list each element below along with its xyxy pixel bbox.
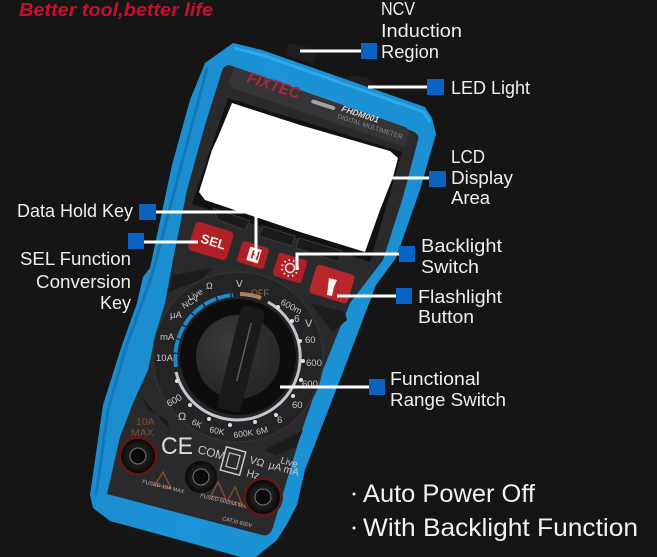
dial labels: 60K	[209, 424, 226, 437]
callout: SEL function conversion key: Key	[100, 292, 132, 313]
callout: functional range switch	[280, 368, 506, 410]
fuse labels: FUSED 10A MAX	[142, 479, 185, 495]
callout: data hold key: Data Hold Key	[17, 200, 134, 221]
dial labels: 60	[305, 335, 316, 346]
callout: LCD display area: Area	[451, 187, 491, 208]
dial labels: mA	[160, 332, 175, 343]
callout: SEL function conversion key: Conversion	[36, 271, 131, 292]
backlight button	[272, 252, 308, 284]
input labels	[245, 454, 300, 482]
callout: NCV induction region: Region	[381, 41, 439, 62]
fuse labels: CAT.III 600V	[222, 516, 253, 529]
top brand strip	[229, 68, 409, 147]
dial tick dots	[175, 305, 305, 427]
model badge	[311, 99, 336, 111]
dial labels	[156, 279, 322, 440]
dial labels: 600	[302, 379, 318, 390]
dial labels: 6K	[190, 417, 204, 430]
callout: backlight switch	[297, 235, 502, 277]
10A MAX marking: 10A	[136, 416, 155, 428]
SEL button	[187, 221, 235, 261]
casing highlight	[234, 48, 430, 122]
10A MAX marking: MAX	[131, 427, 154, 439]
input labels: Live	[279, 455, 299, 470]
dial labels: 10A	[156, 353, 174, 364]
multimeter	[90, 43, 436, 557]
input labels: Hz	[245, 467, 261, 482]
fuse labels: FUSED 600mA MAX	[200, 493, 251, 511]
callout: NCV induction region	[300, 0, 462, 62]
wedge details	[140, 268, 347, 456]
callout: functional range switch: Range Switch	[390, 389, 506, 410]
COM input jack	[185, 461, 217, 493]
blue rubber casing	[90, 43, 436, 557]
dial labels: 600m	[279, 297, 304, 316]
warning triangles	[155, 472, 242, 504]
model subtitle: DIGITAL MULTIMETER	[336, 113, 404, 141]
fuse labels	[142, 479, 253, 529]
callout: NCV induction region: Induction	[381, 20, 462, 41]
rotary knob	[180, 299, 296, 415]
dial labels: 6M	[255, 424, 269, 437]
callout: flashlight button: Flashlight	[418, 286, 502, 307]
dial labels: 600	[306, 358, 322, 369]
dial labels: V	[236, 279, 243, 290]
double insulation symbol	[220, 447, 246, 475]
LCD display area	[199, 103, 398, 252]
callout: flashlight button	[337, 286, 502, 327]
CE mark: CE	[161, 433, 193, 460]
dial labels: V	[305, 318, 313, 330]
dial labels: 60	[292, 400, 303, 411]
feature: with backlight function: With Backlight Function	[363, 514, 638, 542]
casing left shading	[96, 68, 207, 495]
callout: backlight switch: Switch	[421, 256, 479, 277]
model name: FHDM001	[340, 103, 381, 125]
input labels: VΩ	[248, 454, 266, 470]
dial arc: orange OFF segment	[240, 294, 261, 298]
dial arc: grey segment	[176, 302, 300, 420]
callout: LED light	[368, 77, 530, 98]
SEL button: SEL	[199, 231, 228, 253]
dial labels: Live	[186, 286, 205, 303]
callout: data hold key	[17, 200, 256, 256]
V input jack	[243, 477, 283, 517]
COM label: COM	[196, 442, 227, 463]
brand logo: FIXTEC	[245, 70, 303, 103]
hold button	[236, 240, 270, 270]
callout: SEL function conversion key: SEL Function	[20, 248, 131, 269]
input labels: μA mA	[267, 459, 300, 479]
dial labels: μA	[170, 310, 182, 321]
dial labels: 600	[165, 392, 184, 410]
dial labels: 6	[277, 415, 282, 426]
LCD bezel	[192, 98, 402, 262]
feature: auto power off: Auto Power Off	[363, 480, 535, 508]
callout: LCD display area	[392, 146, 514, 208]
dial labels: 600K	[233, 427, 254, 440]
callout: backlight switch: Backlight	[421, 235, 502, 256]
callout: LCD display area: Display	[451, 167, 514, 188]
dial labels: Ω	[178, 411, 186, 423]
callout: flashlight button: Button	[418, 306, 474, 327]
callout: LCD display area: LCD	[451, 146, 485, 167]
callout: LED light: LED Light	[451, 77, 530, 98]
10A MAX marking	[131, 416, 155, 439]
dial plate rim	[153, 272, 323, 442]
NCV probe tip	[285, 43, 318, 64]
callout: functional range switch: Functional	[390, 368, 480, 389]
10A input jack	[118, 436, 158, 476]
dial labels: Ω	[206, 281, 213, 291]
dial arc: blue segment	[175, 295, 233, 367]
hold button: H	[249, 247, 261, 263]
dial labels: 6	[294, 314, 300, 325]
dial labels: OFF	[251, 288, 269, 298]
LED housing	[340, 76, 380, 88]
dark face plate	[107, 65, 418, 535]
small key slots	[213, 208, 342, 262]
callout: SEL function conversion key	[20, 233, 198, 313]
dial plate	[153, 272, 323, 442]
tagline: Better tool,better life	[19, 0, 213, 20]
flashlight button	[308, 264, 356, 304]
dial labels: NCV	[180, 293, 201, 311]
